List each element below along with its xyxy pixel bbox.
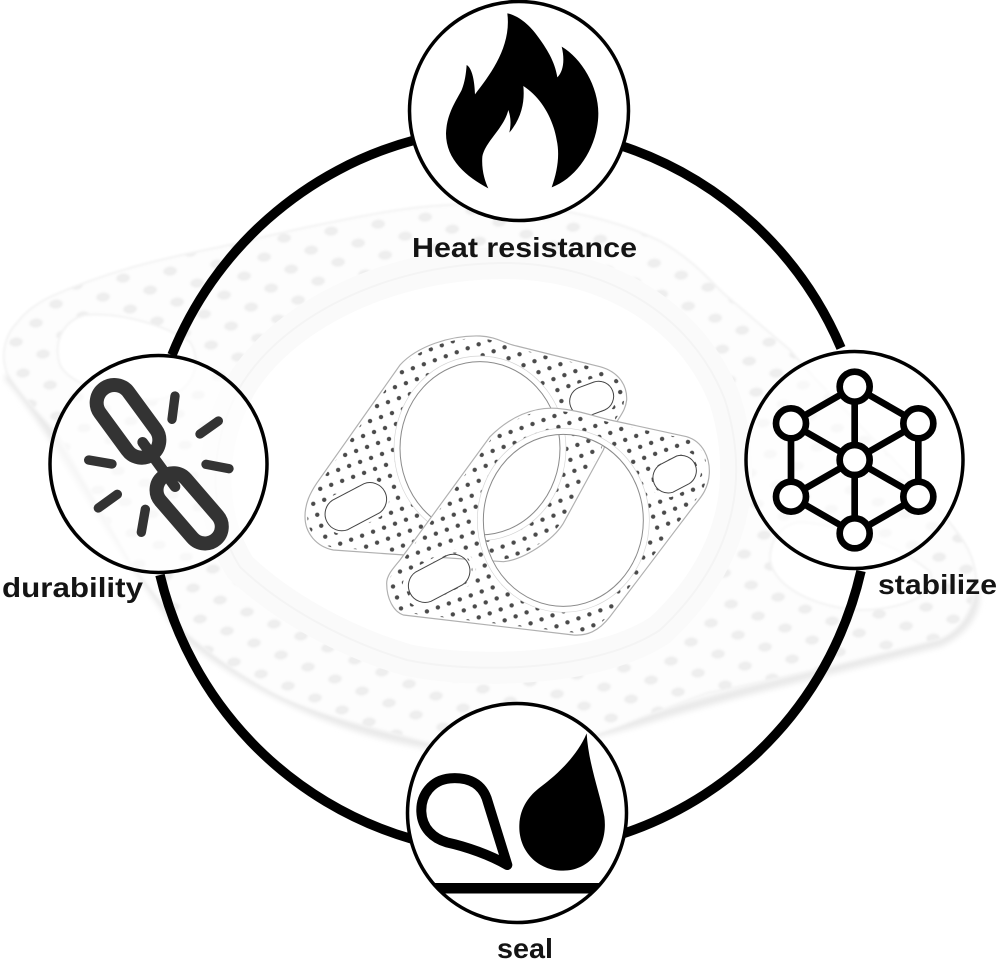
inner band and hole of faint gasket [216, 263, 736, 668]
background: faint enlarged gasket [4, 204, 976, 753]
label: stabilize: stabilize [878, 569, 997, 600]
badge: stabilize [746, 352, 963, 568]
icon: hexagon network [776, 372, 933, 548]
badge: heat resistance [410, 2, 628, 220]
badge: seal [408, 704, 626, 922]
icon: flame [446, 13, 598, 188]
label: heat resistance: Heat resistance [412, 232, 637, 263]
badge: durability [50, 356, 267, 572]
main ring [160, 140, 861, 839]
gasket: front [387, 408, 709, 635]
icon: droplets on surface [421, 733, 605, 894]
gasket: back [305, 336, 627, 562]
central product: two perforated gaskets [305, 336, 709, 635]
icon: broken chain [89, 385, 229, 543]
label: durability: durability [2, 572, 144, 603]
